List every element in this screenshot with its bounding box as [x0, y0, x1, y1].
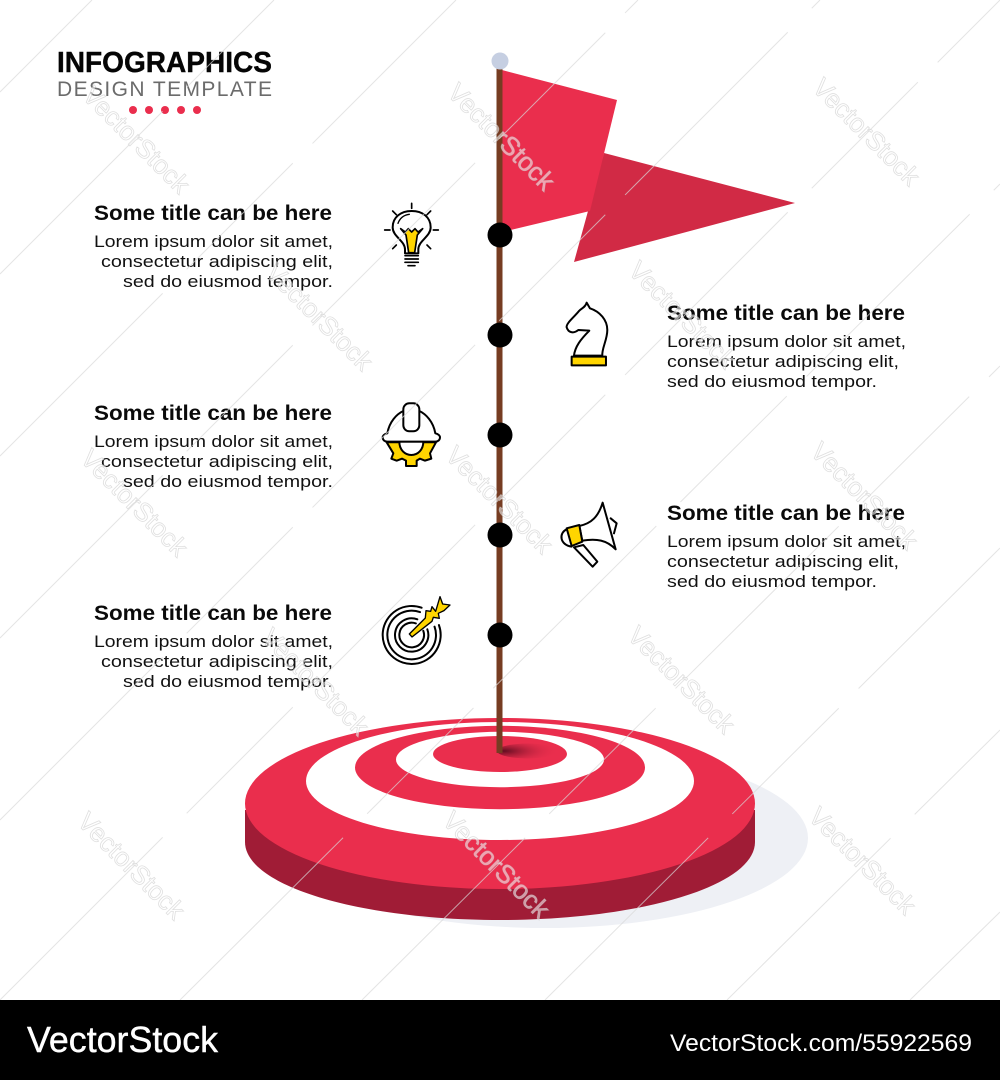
watermarks: VectorStock — [442, 77, 562, 197]
text block 5: Some title can be here — [94, 602, 332, 625]
watermarks: VectorStock — [622, 620, 742, 740]
watermarks: VectorStock — [75, 443, 195, 563]
text block 5: Lorem ipsum dolor sit amet, — [94, 632, 333, 651]
text block 4 — [667, 502, 906, 591]
text block 4: Some title can be here — [667, 502, 905, 525]
text block 2: sed do eiusmod tempor. — [667, 372, 877, 391]
watermarks — [72, 72, 927, 926]
footer bar: VectorStock.com/55922569 — [670, 1030, 972, 1057]
text block 4: consectetur adipiscing elit, — [667, 552, 899, 571]
timeline dots — [488, 222, 512, 648]
text block 4: Lorem ipsum dolor sit amet, — [667, 532, 906, 551]
inner white ring — [396, 732, 604, 787]
icon: helmet and gear — [383, 403, 440, 466]
text block 2: consectetur adipiscing elit, — [667, 352, 899, 371]
text block 2: Some title can be here — [667, 302, 905, 325]
text block 3 — [94, 402, 333, 491]
text block 3: Lorem ipsum dolor sit amet, — [94, 432, 333, 451]
text block 3: Some title can be here — [94, 402, 332, 425]
watermarks: VectorStock — [803, 801, 923, 921]
outer white ring — [306, 722, 694, 840]
icon: light bulb — [385, 203, 438, 266]
text block 1: sed do eiusmod tempor. — [123, 272, 333, 291]
watermarks: VectorStock — [623, 255, 743, 375]
watermarks: VectorStock — [256, 622, 376, 742]
pole top ball — [492, 52, 508, 70]
watermarks: VectorStock — [77, 80, 197, 200]
text block 5: consectetur adipiscing elit, — [101, 652, 333, 671]
text block 5: sed do eiusmod tempor. — [123, 672, 333, 691]
middle red ring — [355, 726, 645, 809]
target board — [245, 718, 808, 928]
watermarks: VectorStock — [260, 257, 380, 377]
icon: megaphone — [561, 503, 617, 567]
pole shadow on bullseye — [497, 744, 559, 758]
text block 3: consectetur adipiscing elit, — [101, 452, 333, 471]
footer bar: VectorStock — [27, 1019, 219, 1060]
text block 1 — [94, 202, 333, 291]
icon: chess knight — [567, 303, 607, 365]
target ground shadow — [282, 748, 808, 928]
text block 1: Lorem ipsum dolor sit amet, — [94, 232, 333, 251]
watermarks: VectorStock — [437, 805, 557, 925]
text block 1: consectetur adipiscing elit, — [101, 252, 333, 271]
flag upper pennant — [502, 70, 617, 232]
text block 3: sed do eiusmod tempor. — [123, 472, 333, 491]
watermarks: VectorStock — [72, 806, 192, 926]
text block 2 — [667, 302, 906, 391]
target top face — [245, 718, 755, 889]
target side wall — [245, 810, 755, 920]
footer bar — [0, 1000, 1000, 1080]
icon: dart target — [383, 597, 450, 664]
title: DESIGN TEMPLATE — [57, 78, 272, 101]
watermarks: VectorStock — [440, 440, 560, 560]
watermarks: VectorStock — [807, 72, 927, 192]
flag pole — [496, 68, 502, 753]
flag — [492, 52, 795, 753]
text block 5 — [94, 602, 333, 691]
flag lower dark pennant — [574, 153, 795, 262]
watermarks: VectorStock — [805, 436, 925, 556]
title: INFOGRAPHICS — [57, 47, 272, 79]
text block 1: Some title can be here — [94, 202, 332, 225]
text block 4: sed do eiusmod tempor. — [667, 572, 877, 591]
bullseye — [433, 736, 567, 772]
text block 2: Lorem ipsum dolor sit amet, — [667, 332, 906, 351]
title — [57, 47, 272, 114]
